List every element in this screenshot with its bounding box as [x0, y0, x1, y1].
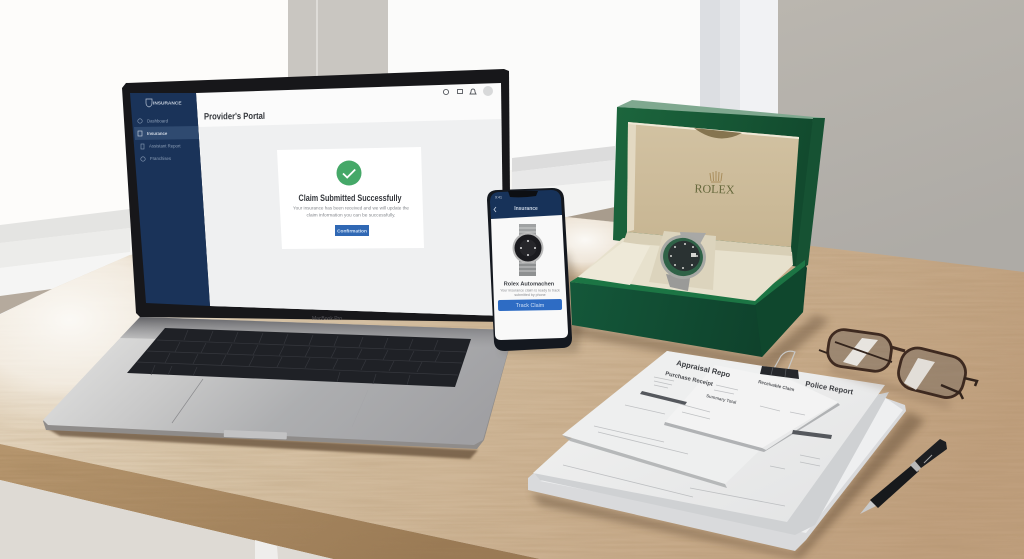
brand crown [710, 171, 722, 182]
appraisal title: Appraisal Repo [676, 358, 732, 379]
sidebar menu: Assistant Report [149, 144, 181, 148]
laptop screen [130, 83, 504, 316]
sidebar menu [138, 118, 181, 161]
watch box [570, 100, 830, 372]
laptop lid bezel [122, 69, 511, 322]
wristwatch [655, 230, 711, 291]
label under screen: MacBook Pro [312, 316, 342, 322]
laptop shadow [46, 428, 478, 459]
glasses shadow [830, 368, 950, 405]
receipt sheet [665, 365, 838, 448]
card button [335, 225, 369, 236]
card message: Your insurance has been received and we will update the [293, 206, 410, 210]
binder clip [760, 351, 799, 379]
card message [293, 206, 410, 218]
phone body [487, 188, 572, 351]
phone button [498, 299, 562, 311]
pillow [649, 231, 716, 290]
phone watch [512, 224, 544, 276]
phone shadow [500, 250, 585, 352]
card button: Confirmation [337, 228, 367, 234]
phone header [490, 190, 562, 219]
phone button: Track Claim [516, 303, 545, 309]
phone message [500, 288, 560, 297]
hinge notch [224, 430, 287, 439]
stack shadow [530, 412, 925, 559]
phone screen [491, 215, 568, 340]
sidebar [130, 93, 210, 306]
phone: Insurance [514, 206, 538, 212]
small heading: Receivable Claim [758, 379, 795, 392]
phone message: submitted by phone [514, 293, 546, 297]
laptop [43, 69, 512, 449]
cushion [578, 238, 793, 301]
simulated text lines [563, 377, 820, 506]
sidebar menu: Insurance [147, 131, 168, 136]
brand logo: INSURANCE [153, 100, 182, 106]
sidebar menu: Franchises [150, 156, 171, 161]
success card [277, 147, 424, 249]
phone title: Rolex Automachen [504, 282, 555, 288]
desk [0, 207, 1024, 559]
pen [860, 439, 947, 514]
portal heading: Provider's Portal [204, 111, 265, 121]
dark table bars [640, 391, 832, 439]
box shadow [570, 315, 830, 372]
glasses [819, 328, 977, 401]
appraisal sheet [562, 351, 835, 484]
card message: claim information you can be successfully. [306, 212, 396, 218]
lower sheets [528, 396, 906, 551]
sidebar menu: Dashboard [147, 118, 169, 124]
check icon [336, 160, 362, 186]
base front [570, 264, 807, 357]
brand logo [146, 99, 182, 107]
receipt title: Purchase Receipt [665, 371, 713, 388]
laptop base [43, 317, 512, 449]
document stack [528, 351, 925, 559]
keyboard [127, 328, 471, 387]
header icons [443, 86, 493, 96]
main sheet [533, 351, 885, 522]
lid [613, 100, 825, 272]
second heading: Summary Total [706, 393, 737, 405]
card heading: Claim Submitted Successfully [298, 193, 402, 203]
brand name: ROLEX [694, 181, 735, 197]
phone: 9:41 [495, 196, 502, 200]
phone [487, 188, 572, 351]
phone message: Your insurance claim is ready to track [500, 288, 560, 292]
police title: Police Report [805, 379, 854, 396]
